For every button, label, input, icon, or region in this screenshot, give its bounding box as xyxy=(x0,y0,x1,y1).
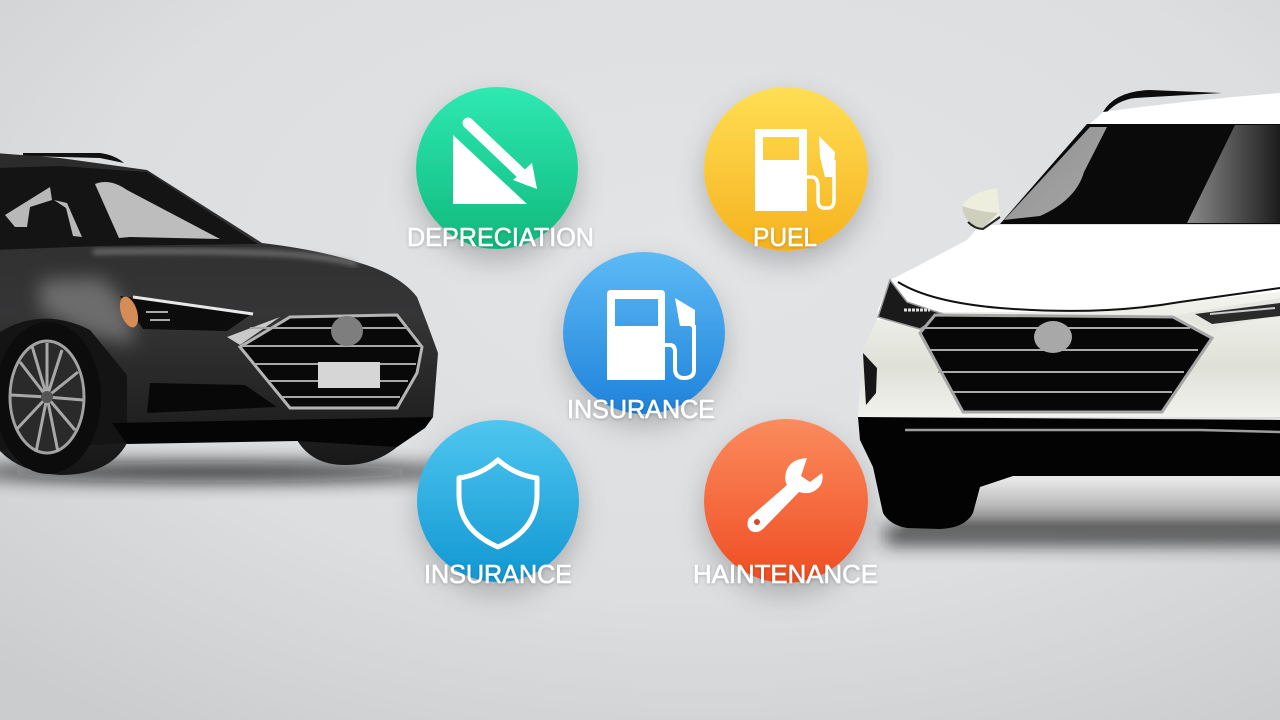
insurance badge xyxy=(417,420,579,589)
icon: fuel pump xyxy=(755,129,835,211)
underbody light xyxy=(900,475,1280,530)
rear window xyxy=(5,187,82,237)
wheel arch xyxy=(0,319,127,450)
icon: falling value xyxy=(453,123,537,204)
fender highlight xyxy=(40,278,135,345)
fuel badge xyxy=(704,87,868,252)
badge xyxy=(1034,321,1072,353)
grille xyxy=(240,315,422,408)
icon: shield xyxy=(459,460,537,547)
roof xyxy=(1090,93,1280,125)
icon: wrench xyxy=(747,458,823,532)
label: INSURANCE xyxy=(567,394,715,424)
right headlight xyxy=(1175,298,1280,331)
label: HAINTENANCE xyxy=(693,559,878,589)
badge xyxy=(331,316,363,346)
left car: dark sedan xyxy=(0,153,455,482)
wheel xyxy=(0,322,101,474)
ground shadow xyxy=(0,462,455,482)
depreciation badge xyxy=(407,87,594,252)
licence plate xyxy=(318,362,380,388)
bumper and front tyre xyxy=(858,417,1280,529)
centre badge xyxy=(563,252,725,424)
windscreen frame xyxy=(1000,124,1280,224)
side window xyxy=(95,182,220,239)
bumper xyxy=(112,417,433,447)
body xyxy=(858,225,1280,417)
headlight xyxy=(116,294,253,331)
label: PUEL xyxy=(753,222,817,252)
roof rack xyxy=(1103,90,1222,113)
grille xyxy=(920,315,1212,412)
ground shadow xyxy=(885,525,1280,545)
side mirror xyxy=(962,188,1000,229)
lower intake xyxy=(147,383,277,413)
label: INSURANCE xyxy=(424,559,572,589)
window surround xyxy=(0,166,258,250)
lower body panel xyxy=(858,292,1280,417)
bumper trim xyxy=(905,430,1280,432)
hood crease xyxy=(898,282,1280,311)
label: DEPRECIATION xyxy=(407,222,594,252)
fog vent xyxy=(863,353,877,405)
hood highlight xyxy=(93,251,357,264)
windscreen right pane xyxy=(1187,125,1280,223)
left headlight xyxy=(878,280,943,329)
maintenance badge xyxy=(693,419,878,589)
body xyxy=(0,153,438,475)
roof rail xyxy=(23,153,124,163)
windscreen left pane xyxy=(1004,127,1107,220)
icon: fuel pump xyxy=(607,290,695,380)
right car: white SUV xyxy=(858,90,1280,545)
daytime light xyxy=(227,317,280,345)
